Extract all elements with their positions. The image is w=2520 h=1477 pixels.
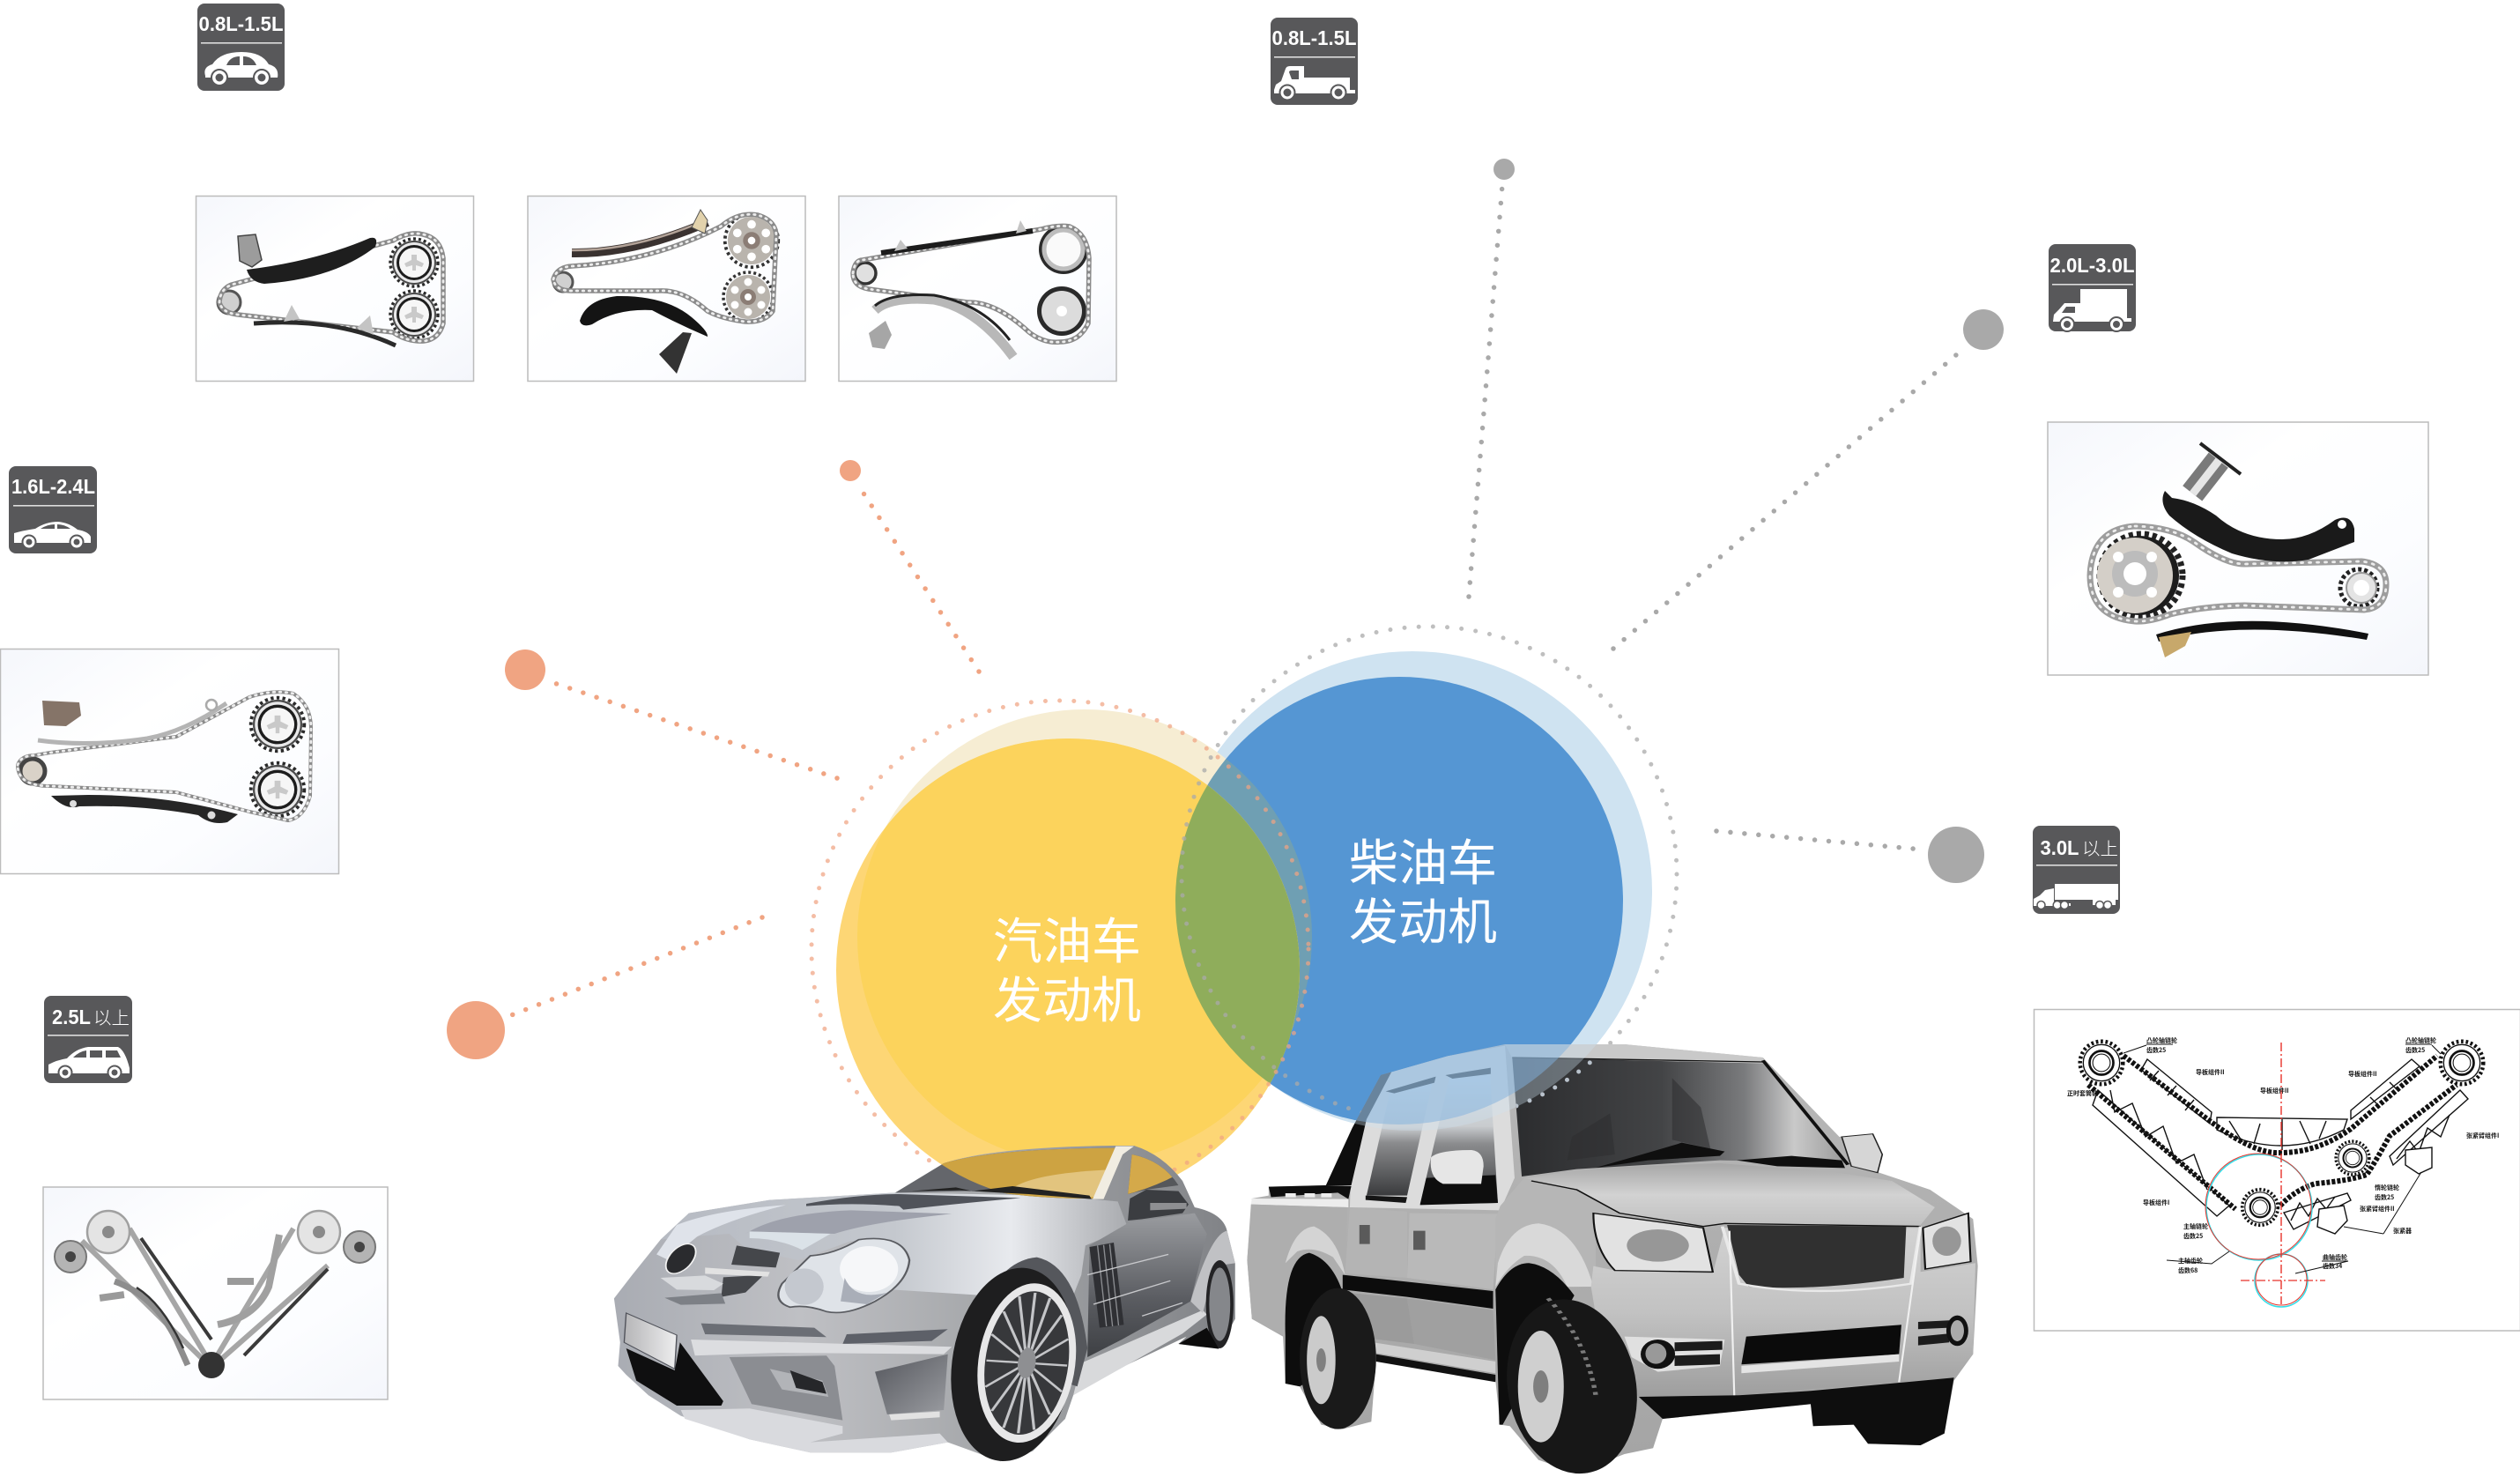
headlight left bbox=[1593, 1214, 1713, 1272]
front fender bbox=[1495, 1178, 1619, 1289]
badge: 2.0L-3.0L truck bbox=[2049, 244, 2136, 331]
roof bbox=[1505, 1044, 1764, 1064]
dotted ring: diesel bbox=[1182, 627, 1677, 1122]
ray: orange medium bbox=[505, 649, 837, 778]
rear bed panel bbox=[1247, 1205, 1347, 1337]
diagram: tensioners bbox=[2317, 1147, 2432, 1234]
icon: MPV bbox=[48, 1047, 130, 1073]
vent bbox=[1089, 1243, 1123, 1328]
diagram: labels: 导板组件II bbox=[2196, 1068, 2225, 1077]
side mirror bbox=[1431, 1150, 1484, 1184]
front tyre bbox=[940, 1264, 1085, 1465]
rear fender bbox=[1190, 1231, 1235, 1313]
hood dark stripe bbox=[806, 1194, 1020, 1210]
ray: orange large bbox=[447, 917, 762, 1059]
a-pillar and wiper bbox=[911, 1147, 1134, 1199]
diagram: labels: 导板组件II bbox=[2348, 1070, 2377, 1079]
truck body bbox=[1247, 1044, 1978, 1473]
fog lamp left bbox=[1625, 1337, 1724, 1372]
diagram: labels: 惰轮链轮 bbox=[2375, 1184, 2399, 1192]
wipers bbox=[1596, 1143, 1845, 1168]
bumper seams bbox=[1730, 1228, 1921, 1395]
diagram: labels: 齿数25 bbox=[2183, 1232, 2203, 1241]
diagram: labels: 齿数34 bbox=[2323, 1262, 2342, 1271]
grille bbox=[1727, 1225, 1906, 1288]
diagram: labels bbox=[2067, 1036, 2499, 1275]
windshield bbox=[895, 1148, 1115, 1199]
rear wheel bbox=[1206, 1260, 1234, 1348]
headlight right bbox=[1923, 1214, 1971, 1269]
door bbox=[1087, 1214, 1207, 1357]
side stripe bbox=[1343, 1275, 1493, 1309]
fog lamp right bbox=[1918, 1320, 1949, 1346]
left intake bbox=[660, 1240, 702, 1277]
side window bbox=[1128, 1154, 1178, 1194]
front rim bbox=[968, 1280, 1085, 1445]
gasoline circle bbox=[836, 738, 1300, 1202]
under-body black bbox=[1639, 1377, 1954, 1445]
wheel arch bbox=[984, 1258, 1087, 1386]
front wheel bbox=[1498, 1296, 1646, 1476]
diagram: labels: 齿数25 bbox=[2405, 1046, 2425, 1055]
icon: sedan bbox=[14, 522, 91, 543]
diagram: labels: 导板组件II bbox=[2260, 1087, 2289, 1095]
diagram: labels: 凸轮轴链轮 bbox=[2405, 1036, 2436, 1045]
text: diesel engine: 发动机 bbox=[1349, 883, 1497, 954]
side skirt bbox=[1073, 1310, 1207, 1395]
car: silver sports car bbox=[614, 1146, 1235, 1465]
rear arch bbox=[1286, 1253, 1354, 1386]
lower intake bbox=[626, 1342, 723, 1406]
diagram: labels: 导板组件I bbox=[2143, 1199, 2169, 1207]
panel: venn circles bbox=[836, 651, 1652, 1202]
diagram: labels: 张紧器 bbox=[2393, 1227, 2412, 1236]
icon: semi truck bbox=[2034, 884, 2118, 906]
license plate bbox=[624, 1313, 677, 1369]
right bumper block bbox=[875, 1355, 948, 1414]
windshield bbox=[1512, 1058, 1844, 1176]
photo: chain kit 2.0L-3.0L bbox=[2048, 422, 2428, 675]
badge: 0.8L-1.5L truck bbox=[1271, 18, 1358, 105]
badge: 3.0L and above bbox=[2033, 826, 2120, 914]
centre bumper bbox=[730, 1355, 842, 1421]
mirror bbox=[1128, 1190, 1189, 1221]
bumper ridge bbox=[691, 1340, 952, 1355]
text: diesel engine: 柴油车 bbox=[1349, 824, 1497, 895]
front panel bbox=[1591, 1228, 1975, 1397]
photo: chain kit C bbox=[839, 196, 1116, 381]
overlap region bbox=[1175, 785, 1300, 1084]
diagram: labels: 曲轴齿轮 bbox=[2323, 1253, 2347, 1262]
rear pillar bbox=[1326, 1072, 1391, 1185]
icon: box truck bbox=[2053, 289, 2131, 322]
badge: 2.0L-3.0L truck: 2.0L-3.0L bbox=[2049, 254, 2134, 277]
badge: 2.5L and above: 2.5L bbox=[52, 1006, 91, 1028]
photo: chain kit B bbox=[528, 196, 805, 381]
badge: 0.8L-1.5L car bbox=[197, 4, 285, 91]
badge: 2.5L and above bbox=[44, 996, 132, 1083]
diagram: guides bbox=[2093, 1059, 2468, 1229]
photo: chain kit A bbox=[196, 196, 474, 381]
bed rail bbox=[1269, 1185, 1352, 1199]
car body bbox=[614, 1146, 1235, 1461]
cab frame bbox=[1350, 1046, 1515, 1210]
hood bbox=[1524, 1163, 1935, 1227]
diagram: labels: 齿数25 bbox=[2146, 1046, 2166, 1055]
diagram: labels: 齿数68 bbox=[2178, 1266, 2198, 1275]
ray: grey medium bbox=[1613, 309, 2004, 649]
rear wheel bbox=[1300, 1288, 1376, 1429]
badge: 2.5L and above: 以上 bbox=[93, 1004, 130, 1029]
icon: pickup truck bbox=[1274, 66, 1355, 93]
car: silver pickup truck bbox=[1247, 1044, 1978, 1473]
badge: 0.8L-1.5L car: 0.8L-1.5L bbox=[199, 12, 284, 35]
badge: 3.0L and above: 3.0L bbox=[2041, 836, 2079, 859]
badge: 3.0L and above: 以上 bbox=[2082, 835, 2118, 860]
blue tint over cab bbox=[1357, 1044, 1571, 1124]
text: gasoline engine: 发动机 bbox=[993, 961, 1141, 1033]
diagram: labels: 正时套筒链 bbox=[2067, 1089, 2098, 1098]
badge: 1.6L-2.4L bbox=[9, 466, 97, 553]
badge: 0.8L-1.5L truck: 0.8L-1.5L bbox=[1272, 26, 1357, 49]
ray: orange small bbox=[840, 460, 979, 672]
photo: engineering diagram bbox=[2034, 1010, 2520, 1331]
door panels bbox=[1345, 1207, 1407, 1278]
diagram: timing chains bbox=[2088, 1056, 2457, 1209]
diagram: labels: 主轴齿轮 bbox=[2178, 1257, 2203, 1265]
ray: grey large bbox=[1716, 827, 1984, 883]
bumper stripes bbox=[701, 1324, 826, 1337]
front arch bbox=[1495, 1263, 1575, 1425]
right mirror bbox=[1842, 1134, 1882, 1173]
photo: chain kit 1.6L-2.4L bbox=[0, 649, 338, 874]
photo: chain kit 2.5L and above bbox=[43, 1187, 388, 1399]
lower intake bbox=[1741, 1325, 1901, 1364]
dots on windshield bbox=[1516, 1060, 1592, 1109]
ray: grey small bbox=[1469, 159, 1515, 597]
diagram: labels: 张紧臂组件I bbox=[2466, 1132, 2499, 1140]
icon: beetle car bbox=[204, 52, 278, 78]
diagram: labels: 张紧臂组件II bbox=[2360, 1205, 2395, 1214]
rear window bbox=[1367, 1078, 1434, 1196]
diagram: pitch circles bbox=[2205, 1043, 2325, 1307]
headlights bbox=[778, 1238, 909, 1312]
front window bbox=[1420, 1069, 1498, 1205]
text: gasoline engine: 汽油车 bbox=[993, 902, 1141, 974]
diagram: labels: 齿数25 bbox=[2375, 1193, 2394, 1202]
hood and fender bbox=[661, 1192, 1128, 1295]
sill bbox=[1354, 1340, 1495, 1373]
diesel circle bbox=[1175, 677, 1623, 1124]
badge: 1.6L-2.4L: 1.6L-2.4L bbox=[11, 475, 95, 498]
dotted ring: gasoline bbox=[812, 701, 1308, 1198]
grille mesh bbox=[722, 1245, 780, 1297]
door handles bbox=[1360, 1225, 1426, 1250]
diagram: labels: 凸轮轴链轮 bbox=[2146, 1036, 2177, 1045]
bottom lip bbox=[681, 1408, 948, 1452]
diagram: labels: 主轴链轮 bbox=[2183, 1222, 2208, 1231]
